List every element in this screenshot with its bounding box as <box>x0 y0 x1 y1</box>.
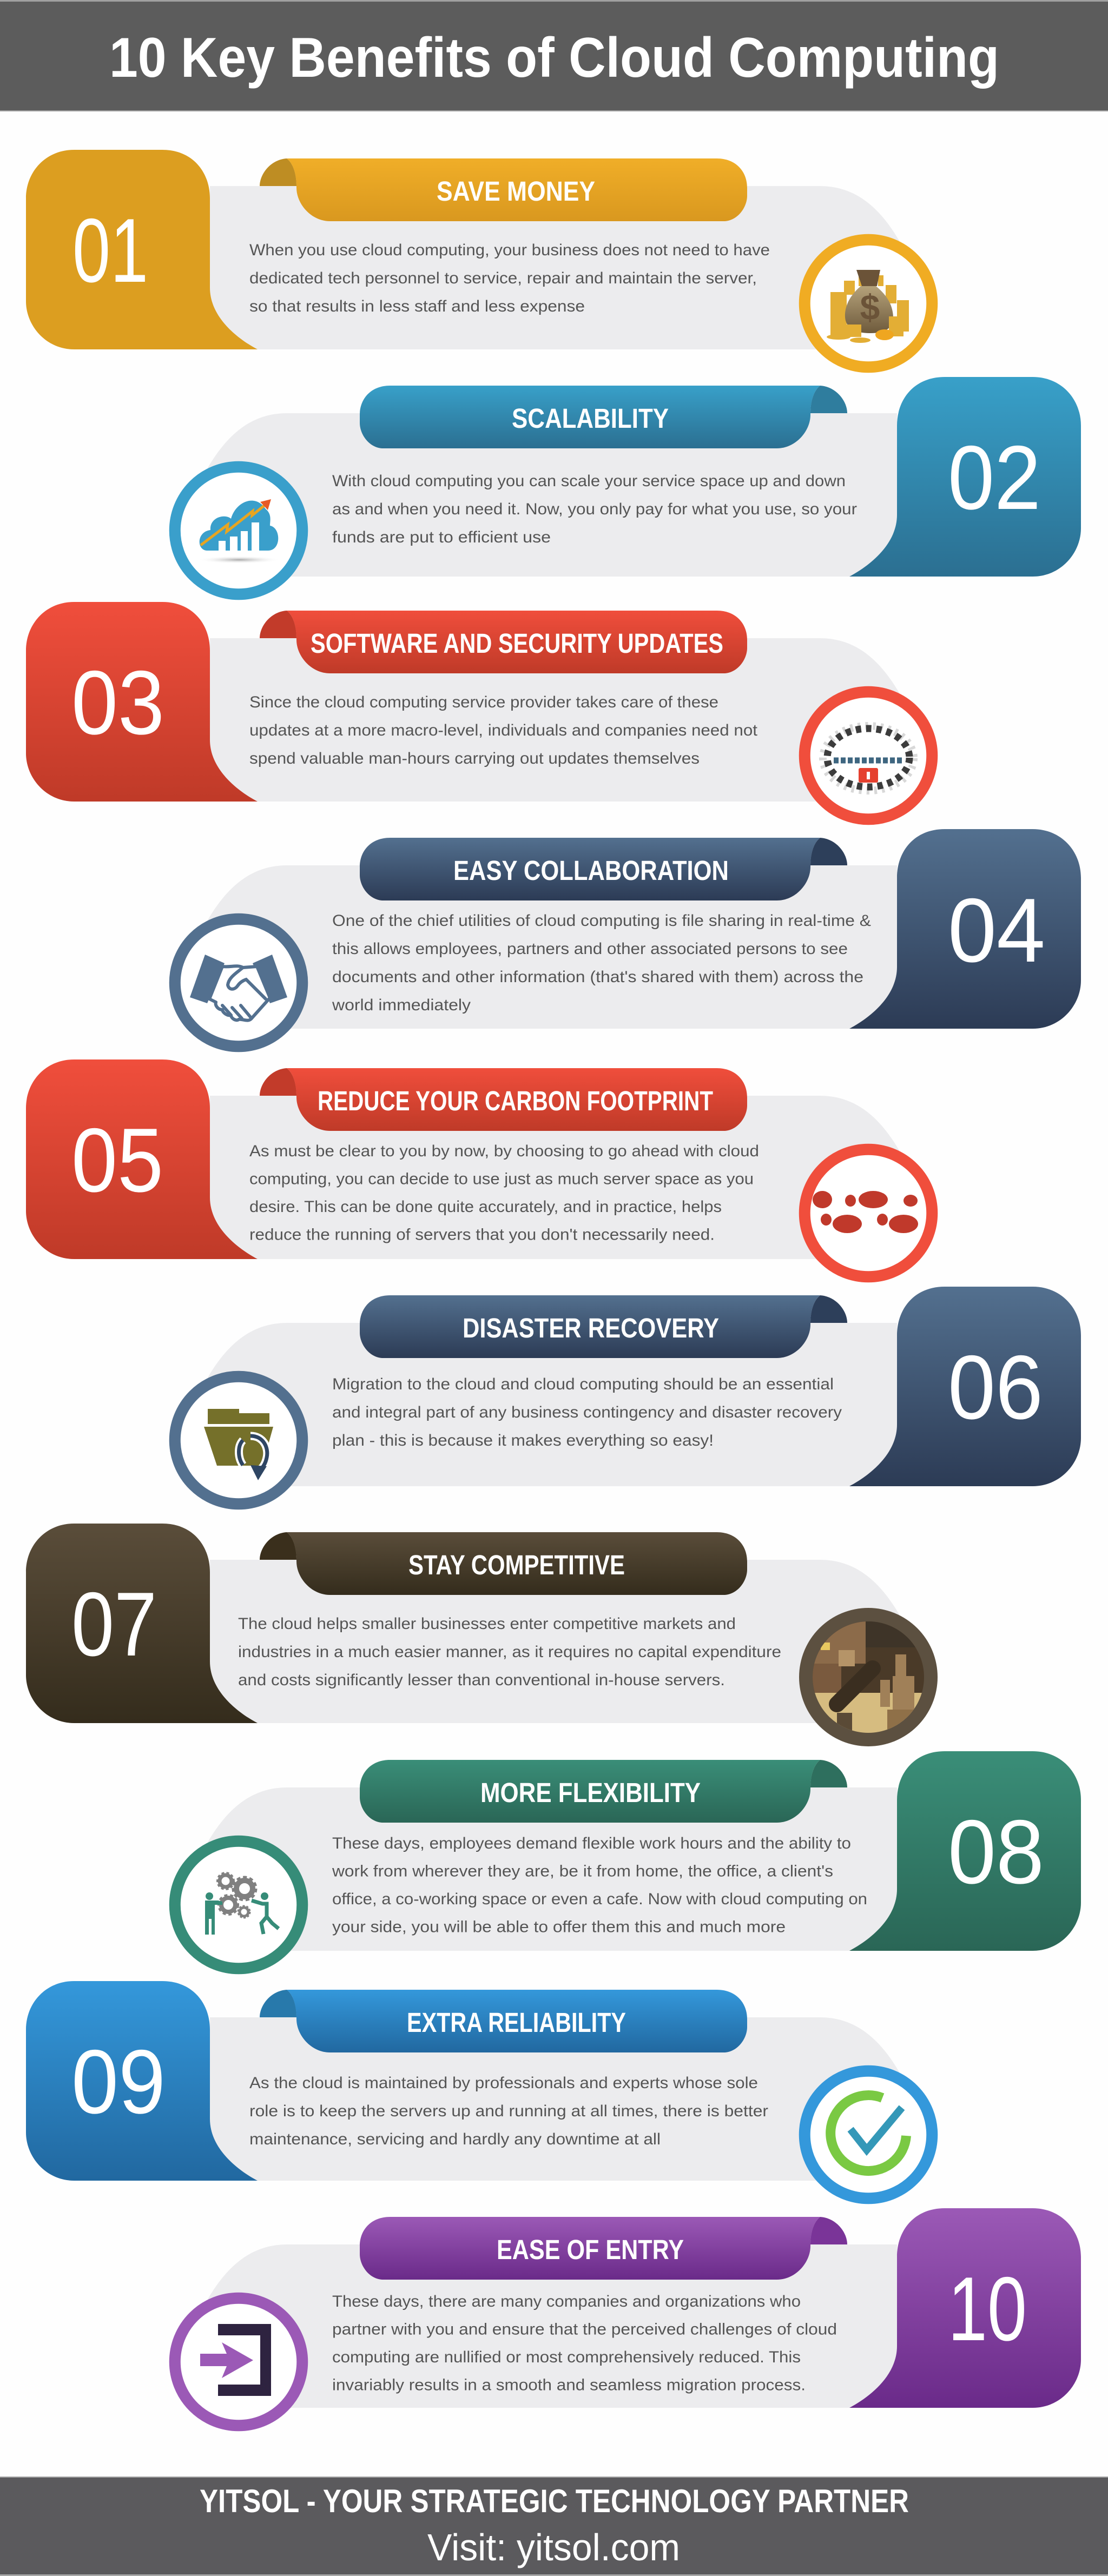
text block: carbon footprint: desire. This can be done quite accurately, and in practice, helps <box>249 1198 722 1216</box>
icon: chess pieces <box>799 1608 938 1746</box>
icon: cloud growth <box>175 467 302 594</box>
icon: footprints <box>804 1149 932 1277</box>
panel: 04 easy collaboration <box>175 829 1081 1047</box>
text block: more flexibility: work from wherever they are, be it from home, the office, a client's <box>332 1863 833 1880</box>
panel: 02 scalability <box>175 377 1081 594</box>
text block: easy collaboration: documents and other information (that's shared with them) across the <box>332 968 863 986</box>
text block: save money: When you use cloud computing, your business does not need to have <box>249 241 770 259</box>
icon: check mark <box>804 2071 932 2198</box>
footer tagline: YITSOL - YOUR STRATEGIC TECHNOLOGY PARTNER <box>200 2483 909 2519</box>
text block: carbon footprint: reduce the running of servers that you don't necessarily need. <box>249 1226 715 1244</box>
text block: scalability: funds are put to efficient use <box>332 528 551 546</box>
text block: save money <box>249 241 770 315</box>
footer banner <box>0 2476 1108 2576</box>
text block: easy collaboration <box>332 912 871 1014</box>
heading: reduce your carbon footprint: REDUCE YOUR CARBON FOOTPRINT <box>318 1085 713 1116</box>
icon: money bag: $ <box>860 287 880 327</box>
heading: stay competitive: STAY COMPETITIVE <box>408 1549 625 1580</box>
panel: 03 software and security updates <box>26 602 932 819</box>
text block: more flexibility: These days, employees demand flexible work hours and the ability to <box>332 1835 851 1852</box>
footer website: Visit: yitsol.com <box>427 2526 680 2568</box>
text block: ease of entry <box>332 2293 837 2394</box>
icon: gears and people <box>175 1841 302 1969</box>
text block: stay competitive: and costs significantly lesser than conventional in-house servers. <box>238 1671 725 1689</box>
header banner <box>0 0 1108 111</box>
text block: disaster recovery: plan - this is because it makes everything so easy! <box>332 1432 714 1449</box>
icon: handshake <box>175 919 302 1047</box>
number 08: 08 <box>948 1801 1044 1903</box>
text block: disaster recovery: Migration to the cloud and cloud computing should be an essential <box>332 1375 834 1393</box>
text block: software updates: Since the cloud computing service provider takes care of these <box>249 693 718 711</box>
icon: folder recovery <box>175 1376 302 1504</box>
text block: stay competitive <box>238 1615 781 1689</box>
number 06: 06 <box>948 1336 1043 1438</box>
text block: software updates <box>249 693 758 767</box>
panel: 09 extra reliability <box>26 1981 932 2198</box>
text block: more flexibility: office, a co-working space or even a cafe. Now with cloud computing on <box>332 1890 867 1908</box>
text block: carbon footprint <box>249 1142 759 1244</box>
heading: software and security updates: SOFTWARE AND SECURITY UPDATES <box>311 628 723 659</box>
number 10: 10 <box>948 2258 1027 2360</box>
text block: carbon footprint: computing, you can decide to use just as much server space as you <box>249 1170 754 1188</box>
text block: ease of entry: computing are nullified or most comprehensively reduced. This <box>332 2348 801 2366</box>
title: 10 Key Benefits of Cloud Computing <box>109 27 999 89</box>
heading: easy collaboration: EASY COLLABORATION <box>453 855 729 886</box>
number 03: 03 <box>71 652 164 753</box>
number 04: 04 <box>948 879 1045 981</box>
number 05: 05 <box>71 1109 163 1211</box>
text block: save money: so that results in less staff and less expense <box>249 297 585 315</box>
heading: disaster recovery: DISASTER RECOVERY <box>463 1313 719 1343</box>
text block: scalability: as and when you need it. Now, you only pay for what you use, so your <box>332 500 857 518</box>
icon: security chain <box>804 692 932 819</box>
heading: extra reliability: EXTRA RELIABILITY <box>407 2007 626 2038</box>
text block: software updates: spend valuable man-hours carrying out updates themselves <box>249 750 700 767</box>
heading: save money: SAVE MONEY <box>437 176 595 207</box>
panel: 10 ease of entry <box>175 2208 1081 2426</box>
panel: 07 stay competitive <box>26 1524 938 1746</box>
icon: entry arrow <box>175 2298 302 2426</box>
panel: 05 reduce carbon footprint <box>26 1059 932 1277</box>
panel: 08 more flexibility <box>175 1751 1081 1969</box>
heading: scalability: SCALABILITY <box>512 403 669 434</box>
number 09: 09 <box>71 2031 166 2133</box>
text block: stay competitive: The cloud helps smaller businesses enter competitive markets and <box>238 1615 736 1633</box>
text block: stay competitive: industries in a much easier manner, as it requires no capital expenditure <box>238 1643 781 1661</box>
text block: easy collaboration: world immediately <box>332 996 471 1014</box>
heading: ease of entry: EASE OF ENTRY <box>497 2234 684 2265</box>
text block: extra reliability: maintenance, servicing and hardly any downtime at all <box>249 2130 661 2148</box>
panel: 06 disaster recovery <box>175 1287 1081 1504</box>
text block: ease of entry: These days, there are many companies and organizations who <box>332 2293 801 2310</box>
number 01: 01 <box>72 200 148 301</box>
text block: more flexibility <box>332 1835 867 1936</box>
text block: carbon footprint: As must be clear to you by now, by choosing to go ahead with cloud <box>249 1142 759 1160</box>
text block: extra reliability <box>249 2074 768 2148</box>
text block: disaster recovery <box>332 1375 842 1449</box>
text block: extra reliability: role is to keep the servers up and running at all times, there is better <box>249 2102 768 2120</box>
text block: extra reliability: As the cloud is maintained by professionals and experts whose sole <box>249 2074 758 2092</box>
panel: 01 save money <box>26 150 932 367</box>
recovery arrow <box>239 1436 267 1480</box>
heading: more flexibility: MORE FLEXIBILITY <box>480 1777 701 1808</box>
text block: easy collaboration: One of the chief utilities of cloud computing is file sharing in real-time & <box>332 912 871 930</box>
text block: more flexibility: your side, you will be able to offer them this and much more <box>332 1918 786 1936</box>
icon: money bag <box>804 240 932 367</box>
text block: scalability: With cloud computing you can scale your service space up and down <box>332 472 846 490</box>
text block: scalability <box>332 472 857 546</box>
text block: software updates: updates at a more macro-level, individuals and companies need not <box>249 721 758 739</box>
number 02: 02 <box>948 427 1041 528</box>
text block: save money: dedicated tech personnel to service, repair and maintain the server, <box>249 269 757 287</box>
text block: disaster recovery: and integral part of any business contingency and disaster recovery <box>332 1403 842 1421</box>
text block: ease of entry: partner with you and ensure that the perceived challenges of cloud <box>332 2320 837 2339</box>
text block: ease of entry: invariably results in a smooth and seamless migration process. <box>332 2376 806 2394</box>
number 07: 07 <box>71 1573 157 1675</box>
text block: easy collaboration: this allows employees, partners and other associated persons to see <box>332 940 848 958</box>
